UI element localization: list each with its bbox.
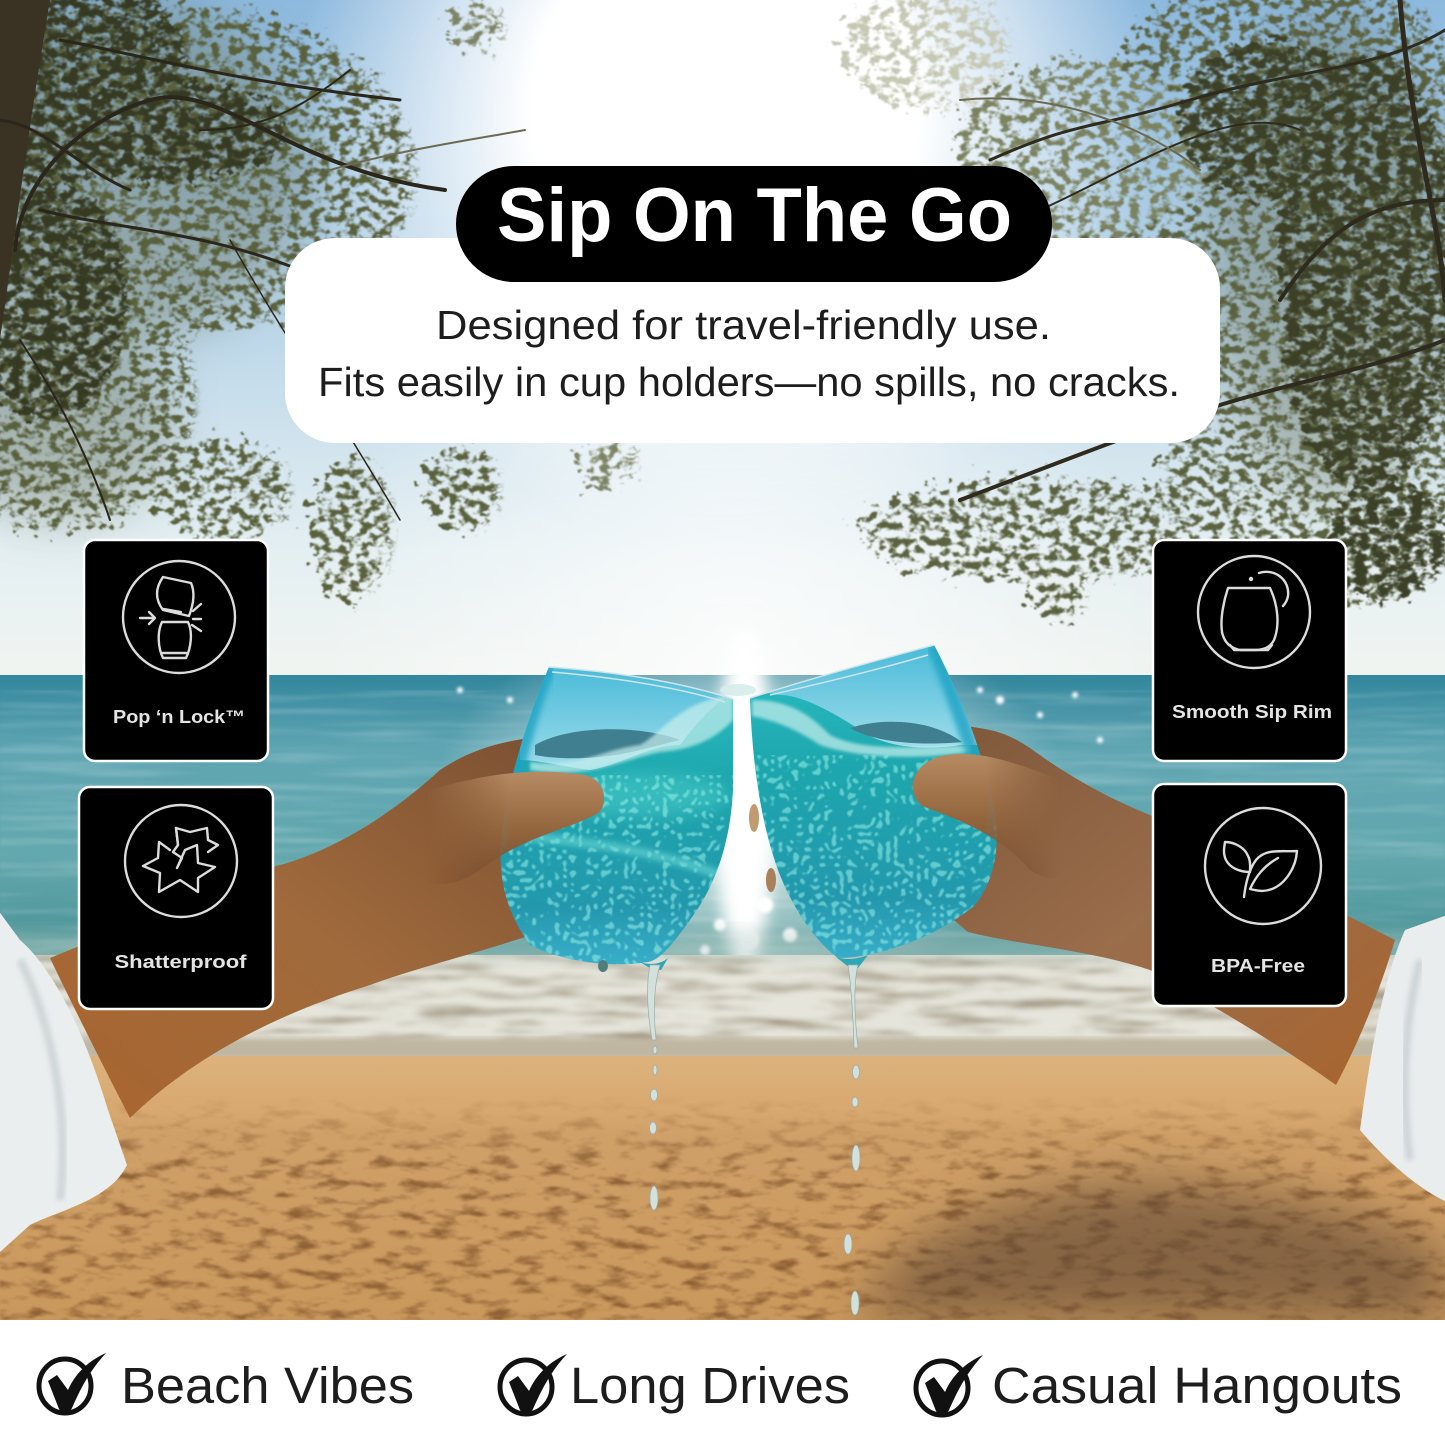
glass: right [720,640,1005,968]
sleeve: left [0,910,127,1252]
sand [0,1056,1445,1322]
arm: right [749,726,1395,1085]
benefit: Beach Vibes: Beach Vibes [121,1357,414,1414]
icon: cup with sip arc [1198,556,1310,668]
title: Sip On The Go [456,166,1052,282]
card: Shatterproof [79,787,273,1009]
label: Shatterproof [114,952,248,972]
panel: white description [285,238,1220,443]
label: Pop ‘n Lock™ [113,707,245,727]
icon: leaves [1205,808,1321,924]
drips [598,960,860,1315]
card: Smooth Sip Rim [1153,540,1346,761]
surf [0,930,1445,1060]
tree: left foliage [0,0,642,600]
card: BPA-Free [1153,784,1346,1006]
title: Sip On The Go: Sip On The Go [497,173,1012,258]
text: description: Fits easily in cup holders—no spills, no cracks. [318,359,1180,405]
icon: shatter burst [125,805,237,917]
icon: check [39,1353,106,1413]
footer: white benefits strip [0,1320,1445,1445]
icon: check [916,1355,983,1415]
icon: check [500,1354,567,1414]
text: description [318,302,1180,405]
label: BPA-Free [1211,956,1305,976]
card: Pop 'n Lock [84,540,268,761]
thumb: right [912,754,1042,874]
sleeve: right [1360,915,1445,1202]
benefit: Long Drives: Long Drives [570,1357,850,1414]
label: Smooth Sip Rim [1172,702,1332,722]
tree: right foliage [845,0,1445,620]
benefit: Casual Hangouts: Casual Hangouts [992,1357,1402,1414]
sea [0,630,1445,975]
thumb: left [444,772,604,882]
glass: left [490,660,740,970]
text: description: Designed for travel-friendly use. [436,302,1051,348]
arm: left [50,738,560,1118]
icon: stacking cups [123,561,235,673]
sky [0,0,1445,690]
